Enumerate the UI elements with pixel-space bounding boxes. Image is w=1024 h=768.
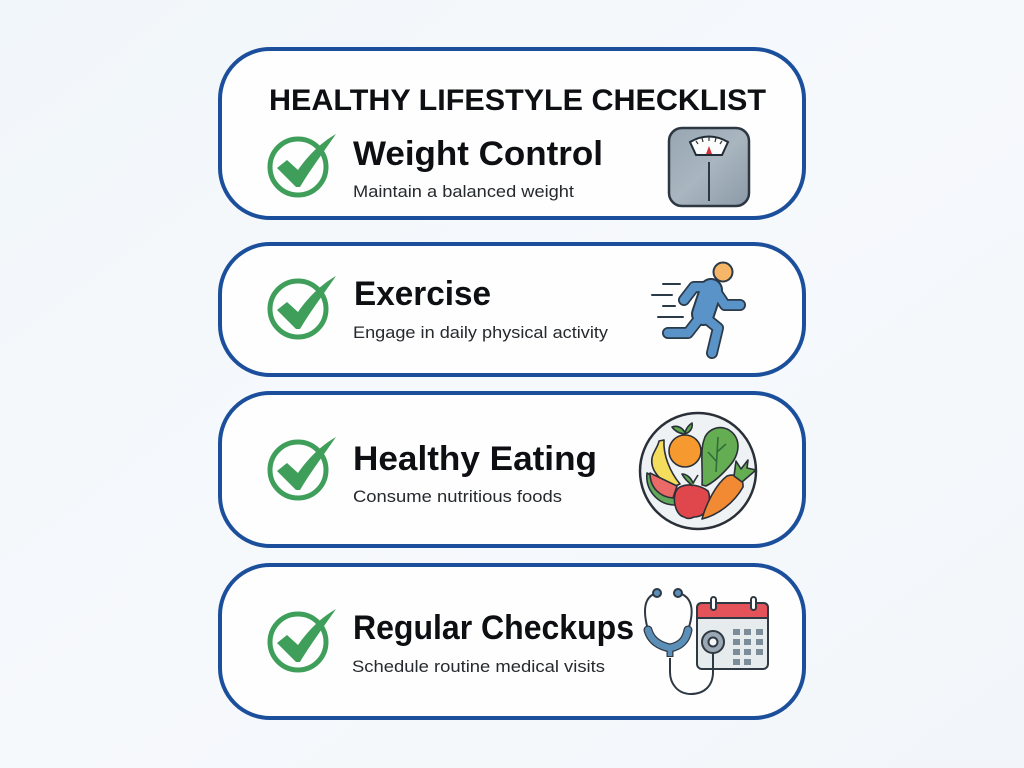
panel: healthy eating (220, 393, 804, 546)
icon: running person (652, 262, 740, 353)
description: exercise: Engage in daily physical activity (353, 323, 609, 342)
description: healthy eating: Consume nutritious foods (353, 487, 562, 506)
icon: plate of fruit and vegetables (640, 413, 756, 529)
icon: stethoscope (645, 589, 724, 694)
icon: green check (270, 134, 336, 195)
panel: exercise (220, 244, 804, 375)
heading: regular checkups: Regular Checkups (353, 609, 634, 647)
icon: green check (270, 609, 336, 670)
icon: calendar (697, 597, 768, 669)
panel: regular checkups (220, 565, 804, 718)
heading: exercise: Exercise (354, 275, 491, 313)
panel: weight control (220, 49, 804, 218)
icon: green check (270, 437, 336, 498)
description: weight control: Maintain a balanced weight (353, 182, 574, 201)
title: HEALTHY LIFESTYLE CHECKLIST (269, 84, 766, 117)
description: regular checkups: Schedule routine medical visits (352, 657, 605, 676)
heading: healthy eating: Healthy Eating (353, 440, 597, 478)
icon: green check (270, 276, 336, 337)
heading: weight control: Weight Control (353, 135, 603, 173)
icon: bathroom scale (669, 128, 749, 206)
